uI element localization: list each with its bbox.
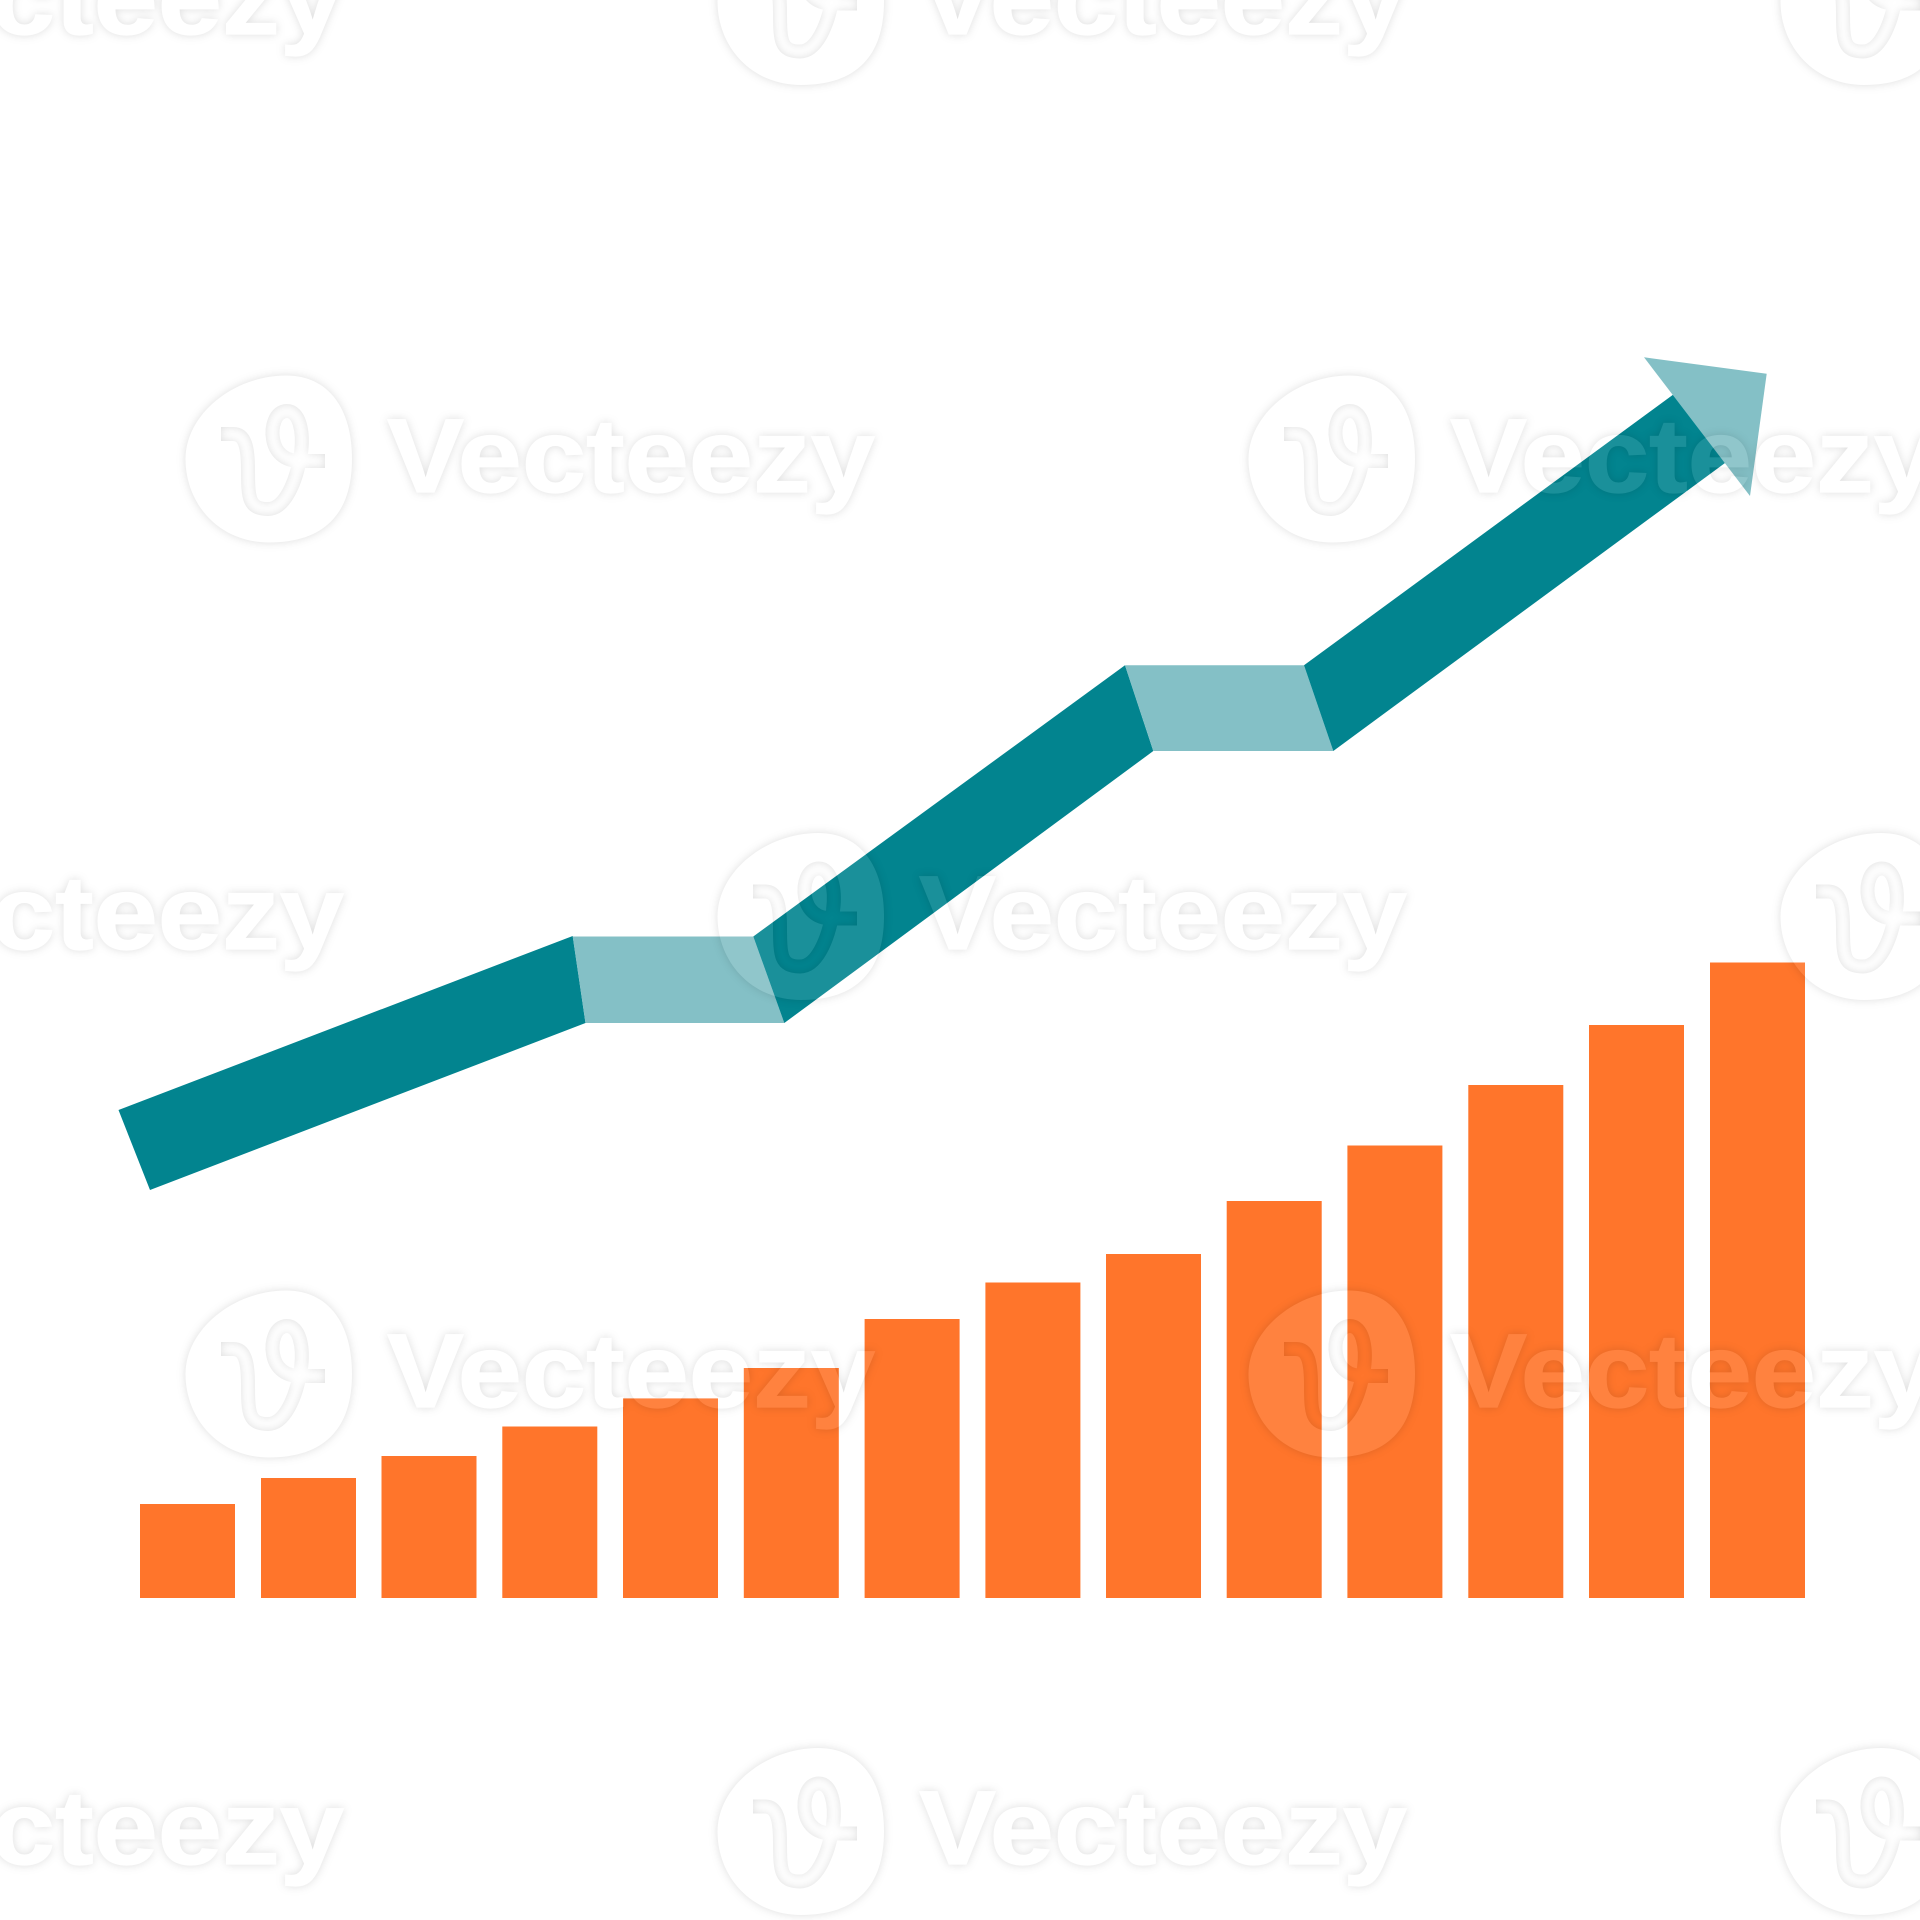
watermark pattern: Vecteezy [919, 1770, 1407, 1887]
bar 6 [744, 1368, 839, 1598]
watermark pattern: Vecteezy [919, 855, 1407, 972]
rising arrow [118, 357, 1767, 1190]
bar 12 [1468, 1085, 1563, 1598]
watermark pattern: Vecteezy [387, 1313, 875, 1430]
bar 2 [261, 1478, 356, 1598]
bar chart [140, 962, 1805, 1598]
bar 10 [1227, 1201, 1322, 1598]
bar 5 [623, 1398, 718, 1598]
bar 14 [1710, 962, 1805, 1598]
bar 8 [985, 1282, 1080, 1598]
arrow head [1644, 357, 1767, 496]
arrow step 1 [573, 936, 784, 1023]
arrow segment 2 [753, 665, 1153, 1023]
arrow segment 1 [118, 936, 586, 1190]
watermark pattern: Vecteezy [1450, 1313, 1920, 1430]
bar 4 [502, 1426, 597, 1598]
watermark pattern: Vecteezy [1450, 398, 1920, 515]
bar 3 [382, 1456, 476, 1598]
bar 13 [1589, 1025, 1684, 1598]
bar 11 [1347, 1146, 1442, 1598]
arrow step 2 [1125, 665, 1333, 751]
bar 9 [1106, 1254, 1201, 1598]
bar 7 [865, 1319, 960, 1598]
watermark pattern: Vecteezy [387, 398, 875, 515]
bar 1 [140, 1504, 235, 1598]
arrow segment 3 [1304, 394, 1725, 751]
